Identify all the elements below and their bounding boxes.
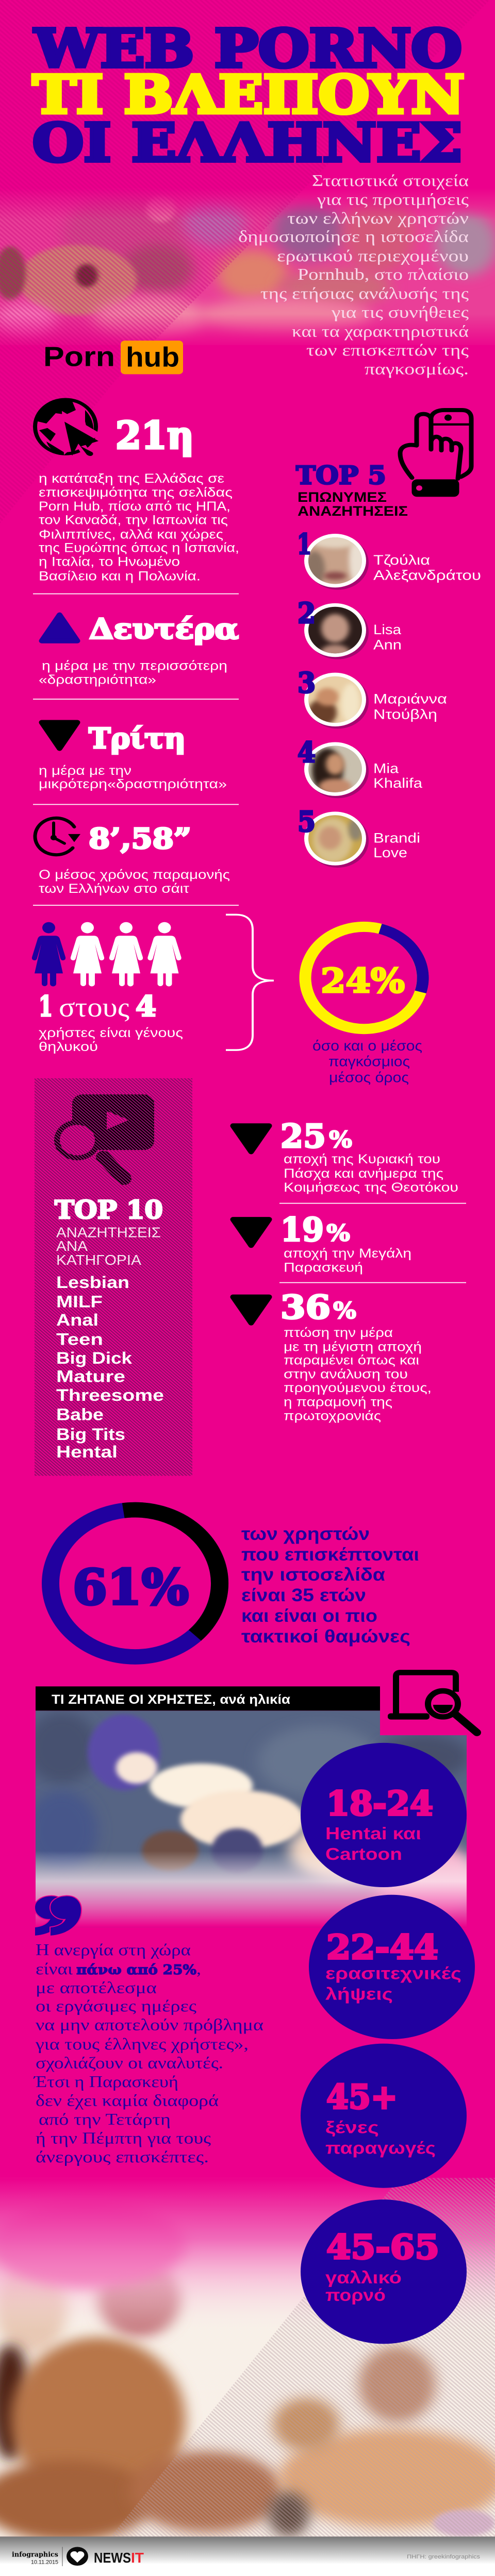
text: most activity (39, 658, 227, 687)
text: same as global average: παγκόσμιος (328, 1054, 410, 1070)
stat block: 25%: 25 (280, 1117, 326, 1155)
quote text: οι εργάσιμες ημέρες (36, 1997, 197, 2015)
quote text: άνεργους επισκέπτες. (36, 2148, 209, 2166)
category list: Hental (56, 1443, 118, 1461)
section: Monday (39, 613, 239, 687)
stat: 21η: 21η (116, 413, 194, 457)
source credit: ΠΗΓΗ: greekinfographics (407, 2553, 480, 2560)
icon: triangle up (42, 615, 77, 641)
category list: Teen (56, 1331, 103, 1349)
stat block: 36% (233, 1289, 432, 1423)
item 2: 2 (298, 597, 316, 630)
icon: four female figures (32, 922, 182, 987)
quote mark (35, 1896, 81, 1936)
age circle: 45-65 (301, 2199, 467, 2344)
quote text: Έτσι η Παρασκευή (33, 2073, 178, 2091)
intro text (238, 172, 469, 378)
text: time description: των Ελλήνων στο σάιτ (39, 881, 189, 895)
text: users description: την ιστοσελίδα (241, 1564, 385, 1584)
item 3: Μαριάννα (373, 691, 447, 707)
stat block: 25%: Πάσχα και ανήμερα της (284, 1166, 443, 1181)
section: 1 in 4 female users (32, 914, 423, 1086)
hero photo area (0, 192, 495, 345)
text: ranking description: Βασίλειο και η Πολωνία. (39, 568, 201, 583)
text: female users: χρήστες είναι γένους (39, 1025, 183, 1040)
intro text: παγκοσμίως. (365, 360, 469, 378)
brace (226, 914, 274, 1050)
text: users description (241, 1523, 419, 1646)
category list: Lesbian (56, 1274, 129, 1292)
age circle: 22-44: λήψεις (325, 1985, 393, 2004)
section: top 5 (296, 410, 481, 868)
item 5: Brandi (373, 831, 420, 846)
text: ranking description (39, 471, 239, 583)
category list: Big Tits (56, 1426, 125, 1444)
stat block: 19% (233, 1211, 411, 1275)
quote text: , (196, 1960, 201, 1978)
text: users description: που επισκέπτονται (241, 1544, 419, 1564)
icon: heart (67, 2547, 88, 2566)
stat block: 36%: στην ανάλυση του (284, 1367, 408, 1381)
text: ranking description: επισκεψιμότητα της σελίδας (39, 485, 233, 499)
quote text: από την Τετάρτη (39, 2111, 171, 2128)
subheading (298, 490, 408, 519)
text: same as global average: μέσος όρος (329, 1070, 409, 1086)
item 3 (298, 666, 447, 728)
subheading: ΕΠΩΝΥΜΕΣ (298, 490, 387, 505)
quote text: είναι (36, 1960, 73, 1978)
item 1: Αλεξανδράτου (373, 568, 481, 583)
stat block: 19%: 19 (280, 1211, 324, 1249)
intro text: για τις συνήθειες (331, 304, 469, 321)
text: ranking description: Φιλιππίνες, αλλά και χώρες (39, 527, 223, 541)
category list: Babe (56, 1406, 104, 1424)
item 1: 1 (297, 528, 311, 561)
item 3: Ντούβλη (373, 707, 437, 722)
text: time description: Ο μέσος χρόνος παραμονής (39, 867, 230, 882)
stat: 1 στους 4 (39, 990, 156, 1023)
stat block: 36%: πρωτοχρονιάς (284, 1408, 381, 1423)
intro text: των ελλήνων χρηστών (287, 210, 469, 227)
intro text: για τις προτιμήσεις (317, 191, 469, 209)
icon: clock (35, 818, 80, 855)
category list: Anal (56, 1311, 98, 1329)
stat block: 36%: προηγούμενου έτους, (284, 1380, 432, 1395)
subheading: ΚΑΤΗΓΟΡΙΑ (56, 1252, 141, 1268)
text: ranking description: τον Καναδά, την Ιαπωνία τις (39, 513, 228, 527)
donut: 61%: 61% (73, 1558, 189, 1616)
footer label and date: infographics (12, 2551, 58, 2558)
footer label and date: 10.11.2015 (31, 2558, 58, 2565)
age circle: 45+: ξένες (325, 2118, 379, 2137)
item 1 (297, 528, 481, 590)
text: ranking description: Porn Hub, πίσω από τις ΗΠΑ, (39, 499, 230, 513)
Pornhub logo (43, 341, 183, 374)
text: ranking description: η Ιταλία, το Ηνωμένο (39, 554, 180, 569)
stat: 1 στους 4: στους (59, 992, 129, 1023)
age circle: 22-44 (309, 1895, 475, 2039)
text: users description: είναι 35 ετών (241, 1585, 366, 1605)
subheading: ΑΝΑ (56, 1239, 88, 1254)
item 2: Lisa (373, 622, 402, 637)
text: time description (39, 867, 230, 895)
section: ranking 21st (33, 398, 239, 583)
section: 61% of users (51, 1510, 419, 1657)
item 4: 4 (298, 736, 316, 769)
age circle: 45-65: 45-65 (326, 2228, 439, 2267)
age circle: 18-24: Cartoon (325, 1844, 402, 1863)
item 3: 3 (298, 666, 316, 699)
title: ΤΙ ΒΛΕΠΟΥΝ (32, 64, 465, 125)
quote text: ή την Πέμπτη για τους (36, 2130, 211, 2147)
quote text: με αποτέλεσμα (36, 1979, 157, 1997)
text: least activity: η μέρα με την (39, 763, 131, 778)
section: Tuesday (39, 722, 227, 791)
text: users description: τακτικοί θαμώνες (241, 1626, 410, 1646)
subheading: ΑΝΑΖΗΤΗΣΕΙΣ (298, 504, 408, 519)
subheading (56, 1225, 161, 1268)
item 4: Mia (373, 761, 399, 776)
intro text: Pornhub, στο πλαίσιο (298, 266, 469, 283)
text: most activity: «δραστηριότητα» (39, 672, 156, 687)
illustration area (26, 1710, 480, 1930)
heading: Τρίτη: Τρίτη (89, 722, 186, 755)
stat block: 19%: Παρασκευή (284, 1260, 363, 1275)
quote text: Η ανεργία στη χώρα (36, 1941, 191, 1959)
heading bar: what users asked: ΤΙ ΖΗΤΑΝΕ ΟΙ ΧΡΗΣΤΕΣ, ανά ηλικία (52, 1692, 290, 1707)
heading: TOP 5: TOP 5 (296, 461, 386, 490)
category list: Big Dick (56, 1349, 133, 1367)
age circle: 22-44: 22-44 (326, 1928, 438, 1967)
stat block: 36%: % (333, 1298, 356, 1324)
stat block: 19%: αποχή την Μεγάλη (284, 1246, 411, 1260)
text: ranking description: της Ευρώπης όπως η Ισπανία, (39, 540, 239, 555)
stat block: 36%: με τη μέγιστη αποχή (284, 1339, 422, 1354)
diagonal stripe overlay (0, 0, 490, 523)
intro text: της ετήσιας ανάλυσής της (260, 285, 469, 303)
text: users description: και είναι οι πιο (241, 1605, 377, 1625)
category list (56, 1274, 164, 1461)
age circle: 22-44: ερασιτεχνικές (325, 1964, 461, 1983)
text: least activity: μικρότερη«δραστηριότητα» (39, 776, 227, 791)
quote text: σχολιάζουν οι αναλυτές. (36, 2055, 223, 2072)
intro text: Στατιστικά στοιχεία (312, 172, 469, 190)
age circle: 18-24 (301, 1743, 467, 1887)
quote text: πάνω από 25% (76, 1962, 196, 1977)
age circle: 45+: 45+ (326, 2078, 398, 2117)
icon: laptop with magnifier (388, 1672, 477, 1733)
stat block: 25%: % (329, 1127, 352, 1153)
NewsIT logo: NEWS (94, 2550, 131, 2566)
text: users description: των χρηστών (241, 1523, 370, 1544)
heading: TOP 10: TOP 10 (55, 1196, 163, 1225)
item 5 (298, 805, 420, 868)
age circle: 45-65: γαλλικό (325, 2268, 402, 2287)
item 5: 5 (298, 805, 316, 838)
intro text: ερωτικού περιεχομένου (277, 247, 469, 265)
text: female users: θηλυκού (39, 1039, 98, 1054)
Pornhub logo: Porn (43, 341, 115, 372)
text: most activity: η μέρα με την περισσότερη (42, 658, 227, 673)
text: same as global average: όσο και ο μέσος (312, 1038, 422, 1054)
Pornhub logo: hub (126, 342, 179, 373)
item 2: Ann (373, 637, 402, 653)
category list: MILF (56, 1293, 103, 1311)
stat block: 19%: % (326, 1221, 350, 1247)
stat: 1 στους 4: 1 (39, 990, 53, 1023)
age circle: 18-24: 18-24 (326, 1785, 433, 1823)
stat: 8',58'': 8’,58” (89, 822, 191, 855)
footer label and date (12, 2551, 58, 2565)
item 4 (298, 736, 423, 798)
title: ΟΙ ΕΛΛΗΝΕΣ (32, 112, 463, 173)
stat block: 25%: Κοιμήσεως της Θεοτόκου (284, 1180, 458, 1195)
stat: 1 στους 4: 4 (136, 990, 156, 1023)
stat block: 36%: 36 (280, 1289, 331, 1326)
heading: Δευτέρα: Δευτέρα (89, 613, 239, 646)
quote text: να μην αποτελούν πρόβλημα (36, 2016, 263, 2034)
item 5: Love (373, 845, 407, 861)
heading bar: what users asked (36, 1686, 380, 1710)
stat block: 25%: αποχή της Κυριακή του (284, 1151, 440, 1166)
icon: video search (54, 1094, 154, 1179)
donut: 24%: 24% (321, 961, 405, 1001)
title: WEB PORNO (34, 18, 462, 79)
intro text: των επισκεπτών της (306, 342, 469, 359)
age circle: 45-65: πορνό (325, 2285, 386, 2304)
quote text (33, 1941, 263, 2166)
item 1: Τζούλια (373, 553, 430, 568)
panel: top 10 categories (35, 1078, 192, 1476)
NewsIT logo: IT (131, 2550, 144, 2566)
quote text: δεν έχει καμία διαφορά (36, 2092, 219, 2110)
text: female users (39, 1025, 183, 1054)
lower photo area (0, 2178, 495, 2537)
text: ranking description: η κατάταξη της Ελλάδας σε (39, 471, 224, 485)
age circle: 45+ (301, 2044, 467, 2188)
quote text: για τους έλληνες χρήστες», (35, 2036, 249, 2053)
age circle: 45+: παραγωγές (325, 2139, 436, 2158)
intro text: δημοσιοποίησε η ιστοσελίδα (238, 228, 469, 246)
text: least activity (39, 763, 227, 791)
stat block: 36%: παραμένει όπως και (284, 1353, 419, 1367)
icon: triangle down (42, 722, 77, 749)
age circle: 18-24: Hentai και (325, 1824, 421, 1843)
text: same as global average (312, 1038, 422, 1086)
stat block: 25% (233, 1117, 458, 1195)
footer (0, 2536, 495, 2576)
subheading: ΑΝΑΖΗΤΗΣΕΙΣ (56, 1225, 161, 1241)
stat block: 36%: η παραμονή της (284, 1394, 392, 1409)
intro text: και τα χαρακτηριστικά (292, 323, 469, 341)
category list: Mature (56, 1368, 125, 1386)
stat block: 36%: πτώση την μέρα (284, 1325, 393, 1340)
title (32, 18, 465, 173)
section: average time (35, 818, 230, 895)
category list: Threesome (56, 1386, 164, 1405)
item 2 (298, 601, 401, 659)
icon: globe with cursor (33, 398, 103, 462)
item 4: Khalifa (373, 776, 423, 791)
donut: 24% (305, 927, 423, 1029)
icon: hand holding phone (400, 410, 471, 495)
donut: 61% (51, 1510, 220, 1657)
